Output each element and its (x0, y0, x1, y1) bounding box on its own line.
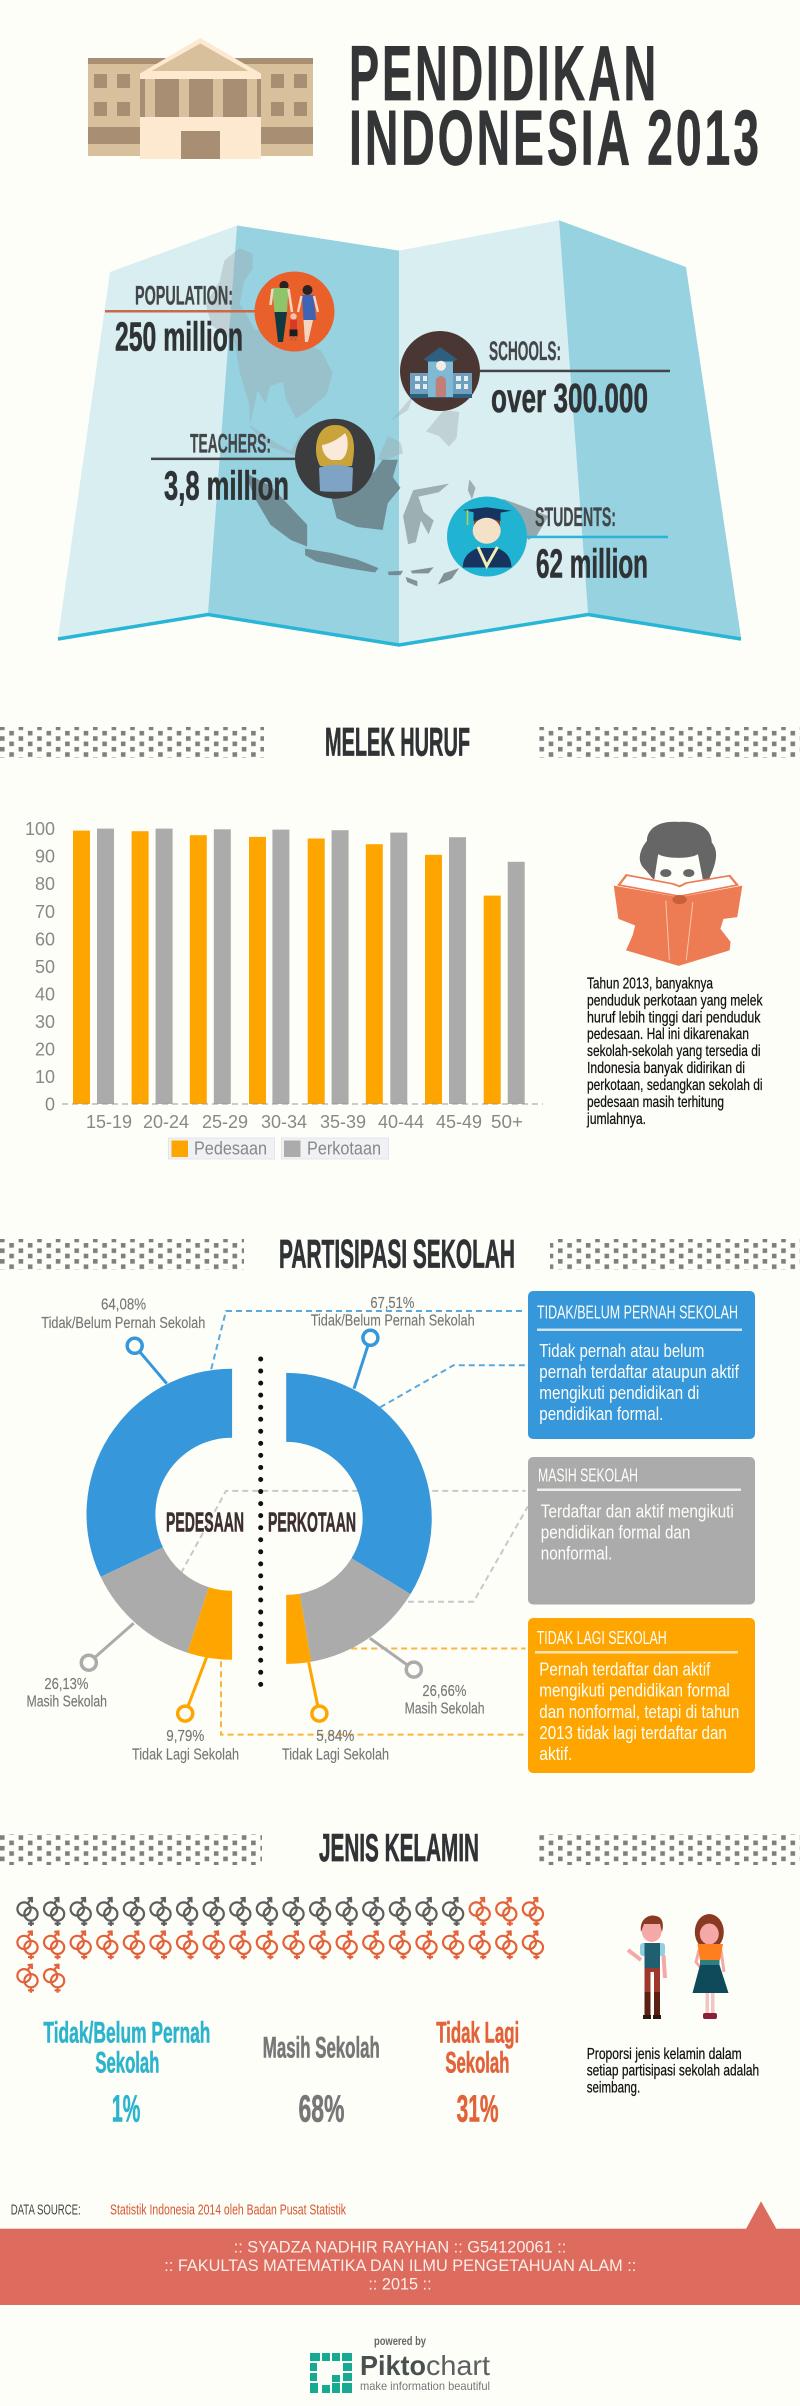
legend (168, 1138, 388, 1159)
section band: partisipasi sekolah (0, 1232, 800, 1276)
footer banner: :: 2015 :: (368, 2274, 432, 2294)
bar chart: literacy: 70 (35, 902, 55, 922)
donut value labels: 26,13% (44, 1676, 89, 1693)
bar chart: literacy: 40 (35, 984, 55, 1004)
piktochart logo (310, 2334, 490, 2393)
donut value labels: Tidak/Belum Pernah Sekolah (311, 1312, 475, 1330)
text block: literacy note: pedesaan masih terhitung (587, 1094, 724, 1111)
panel: masih sekolah: MASIH SEKOLAH (538, 1464, 638, 1485)
stat: schools: over 300.000 (491, 375, 648, 421)
text block: gender note: seimbang. (587, 2080, 640, 2097)
bar chart: literacy: 10 (35, 1067, 55, 1087)
stat: tidak lagi sekolah 31%: Sekolah (445, 2046, 509, 2080)
data source (11, 2201, 346, 2218)
stat: population (105, 272, 334, 360)
donut value labels: 5,84% (316, 1728, 354, 1745)
panel: tidak/belum pernah sekolah (528, 1291, 755, 1439)
stat: masih sekolah 68% (263, 2031, 380, 2131)
legend: Pedesaan (194, 1138, 267, 1158)
donut value labels: 67,51% (370, 1295, 415, 1312)
stat: students: 62 million (536, 541, 648, 587)
stat: tidak/belum pernah sekolah 1%: 1% (112, 2089, 140, 2131)
panel: masih sekolah: nonformal. (541, 1544, 612, 1564)
donut centre labels: PEDESAAN (166, 1506, 244, 1537)
donut value labels: Tidak Lagi Sekolah (132, 1746, 239, 1764)
illustration: boy and girl (628, 1914, 728, 2019)
piktochart logo: make information beautiful (360, 2379, 490, 2393)
bar chart: literacy: 20-24 (143, 1112, 189, 1132)
panel: tidak lagi sekolah: TIDAK LAGI SEKOLAH (537, 1627, 667, 1648)
donut chart: pedesaan (86, 1369, 232, 1660)
stat: students (447, 496, 668, 587)
divider: dotted line (258, 1359, 263, 1685)
icon: family (254, 272, 334, 352)
donut value labels: Tidak/Belum Pernah Sekolah (41, 1315, 205, 1332)
stat: tidak/belum pernah sekolah 1%: Tidak/Belum Pernah (43, 2016, 210, 2049)
bar chart: literacy: 20 (35, 1039, 55, 1059)
footer banner (0, 2201, 800, 2305)
connector lines (181, 1311, 528, 1735)
illustration: person reading book (614, 822, 742, 966)
donut value labels (26, 1295, 485, 1764)
panel: masih sekolah (528, 1457, 755, 1604)
donut value labels: 64,08% (101, 1296, 146, 1314)
bar chart: literacy: 60 (35, 929, 55, 949)
text block: literacy note: jumlahnya. (586, 1111, 646, 1128)
data source: DATA SOURCE: (11, 2201, 81, 2218)
text block: literacy note (586, 976, 763, 1128)
donut value labels: Masih Sekolah (26, 1694, 107, 1711)
stat: students: STUDENTS: (535, 502, 616, 532)
stat: tidak lagi sekolah 31%: Tidak Lagi (436, 2016, 519, 2049)
bar chart: literacy: 45-49 (436, 1112, 482, 1132)
stat: tidak lagi sekolah 31%: 31% (457, 2089, 499, 2131)
bar chart: literacy: 25-29 (202, 1112, 248, 1132)
heading: partisipasi sekolah: PARTISIPASI SEKOLAH (279, 1232, 515, 1276)
piktochart logo: chart (426, 2350, 490, 2381)
bar chart: literacy: 100 (25, 819, 55, 839)
section band: melek huruf (0, 721, 800, 765)
bar chart: literacy: 15-19 (86, 1112, 132, 1132)
panel: tidak lagi sekolah: mengikuti pendidikan formal (539, 1681, 730, 1701)
stat: schools (400, 331, 670, 421)
stat: teachers (151, 419, 375, 509)
panel: tidak/belum pernah sekolah: Tidak pernah atau belum (539, 1341, 704, 1361)
icon: graduate (447, 496, 527, 576)
donut value labels: Masih Sekolah (405, 1701, 485, 1718)
text block: gender note (587, 2046, 759, 2097)
donut value labels: 9,79% (166, 1728, 204, 1745)
stat: tidak/belum pernah sekolah 1%: Sekolah (95, 2046, 159, 2080)
legend: Perkotaan (307, 1138, 381, 1158)
stat: masih sekolah 68%: 68% (298, 2089, 344, 2131)
pictogram: gender icons (17, 1898, 543, 1993)
heading: jenis kelamin: JENIS KELAMIN (319, 1827, 479, 1870)
icon: piktochart mark (310, 2353, 352, 2393)
stat: population: 250 million (115, 314, 243, 360)
bar chart: literacy: 0 (45, 1094, 55, 1114)
panel: tidak/belum pernah sekolah: pendidikan formal. (539, 1404, 663, 1424)
stat: schools: SCHOOLS: (489, 336, 561, 366)
panel: tidak/belum pernah sekolah: pernah terdaftar ataupun aktif (539, 1362, 740, 1382)
piktochart logo: Pikto (360, 2350, 426, 2381)
section band: melek huruf: MELEK HURUF (325, 721, 470, 765)
panel: tidak lagi sekolah (528, 1618, 755, 1773)
panel: masih sekolah: pendidikan formal dan (541, 1523, 690, 1543)
panel: tidak lagi sekolah: Pernah terdaftar dan aktif (539, 1660, 711, 1680)
panel: tidak lagi sekolah: 2013 tidak lagi terdaftar dan (539, 1723, 727, 1743)
icon: school building (400, 331, 480, 411)
donut value labels: 26,66% (422, 1683, 467, 1700)
text block: literacy note: Indonesia banyak didirikan di (587, 1060, 745, 1077)
bar chart: literacy: 50+ (491, 1112, 523, 1132)
leader pins (81, 1330, 421, 1721)
stat: population: POPULATION: (135, 280, 233, 310)
footer banner: :: FAKULTAS MATEMATIKA DAN ILMU PENGETAHUAN ALAM :: (164, 2256, 636, 2275)
text block: literacy note: pedesaan. Hal ini dikarenakan (587, 1026, 749, 1043)
donut value labels: Tidak Lagi Sekolah (282, 1746, 389, 1764)
text block: literacy note: Tahun 2013, banyaknya (587, 976, 713, 992)
illustration: university building (88, 38, 313, 159)
stat: tidak/belum pernah sekolah 1% (43, 2016, 210, 2131)
bar chart: literacy: 30 (35, 1012, 55, 1032)
bar chart: literacy: 40-44 (378, 1112, 424, 1132)
bar chart: literacy: 80 (35, 874, 55, 894)
bar chart: literacy (25, 819, 543, 1159)
data source: Statistik Indonesia 2014 oleh Badan Pusat Statistik (110, 2201, 346, 2218)
map: south east asia landmass (206, 248, 548, 586)
title (349, 29, 762, 182)
panel: tidak/belum pernah sekolah: mengikuti pendidikan di (539, 1383, 699, 1403)
donut chart: perkotaan (286, 1373, 432, 1664)
bar chart: literacy: 90 (35, 847, 55, 867)
panel: tidak lagi sekolah: aktif. (539, 1744, 572, 1764)
text block: gender note: Proporsi jenis kelamin dalam (587, 2046, 742, 2063)
bar chart: literacy: 30-34 (261, 1112, 307, 1132)
piktochart logo: powered by (374, 2334, 426, 2348)
panel: folded map (58, 220, 741, 645)
stat: masih sekolah 68%: Masih Sekolah (263, 2031, 380, 2064)
section band: jenis kelamin (0, 1827, 800, 1870)
stat: teachers: 3,8 million (164, 463, 289, 509)
panel: masih sekolah: Terdaftar dan aktif mengikuti (541, 1502, 734, 1522)
stat: teachers: TEACHERS: (190, 429, 271, 459)
panel: tidak lagi sekolah: dan nonformal, tetapi di tahun (539, 1702, 739, 1722)
bar chart: literacy: 35-39 (320, 1112, 366, 1132)
footer banner: :: SYADZA NADHIR RAYHAN :: G54120061 :: (234, 2237, 566, 2256)
stat: tidak lagi sekolah 31% (436, 2016, 519, 2131)
bar chart: literacy: 50 (35, 957, 55, 977)
icon: teacher (295, 419, 375, 499)
donut centre labels: PERKOTAAN (268, 1506, 356, 1537)
